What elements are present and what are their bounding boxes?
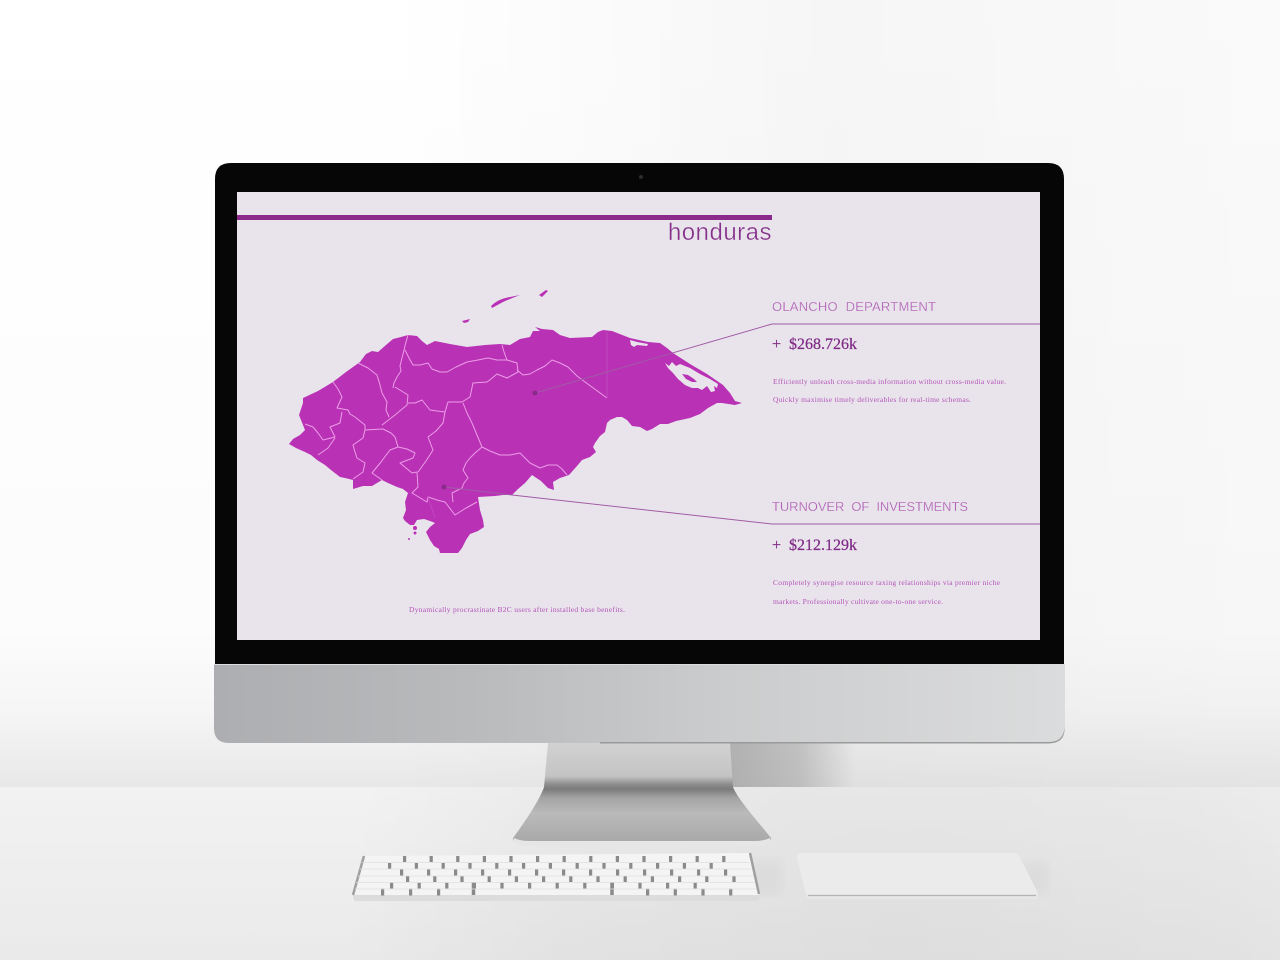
stand shadow on wall	[730, 743, 855, 787]
trackpad edge line	[808, 894, 1036, 896]
panel: Turnover of investments	[772, 499, 1001, 606]
monitor chin	[214, 664, 1065, 743]
key gaps	[381, 859, 740, 895]
desk shading	[0, 787, 1280, 960]
camera	[639, 175, 643, 179]
leader line: Olancho	[532, 324, 1040, 396]
trackpad	[797, 853, 1038, 899]
description line 2: markets. Professionally cultivate one-to-one service.	[773, 597, 943, 606]
islands	[408, 290, 548, 540]
trackpad shadow	[1022, 862, 1048, 894]
title bar	[237, 215, 772, 220]
map landmass	[289, 327, 742, 553]
trackpad front edge	[806, 894, 1038, 899]
chin lower rim	[600, 728, 1065, 744]
trackpad top	[797, 853, 1038, 895]
value: + $212.129k	[772, 537, 857, 554]
faint straight border	[428, 332, 607, 518]
key row lines	[355, 862, 756, 889]
keyboard	[352, 853, 759, 901]
monitor stand	[513, 743, 771, 846]
value: + $268.726k	[772, 336, 857, 353]
panel: Olancho department	[772, 299, 1006, 404]
keyboard side edges	[353, 853, 759, 895]
keyboard body	[352, 853, 759, 901]
heading: TURNOVER OF INVESTMENTS	[772, 499, 968, 514]
desk surface	[0, 787, 1280, 960]
map of Honduras	[289, 290, 742, 553]
keyboard shadow	[752, 860, 782, 894]
monitor body black bezel	[215, 163, 1064, 665]
department borders	[305, 335, 607, 515]
map caption: Dynamically procrastinate B2C users after installed base benefits.	[409, 605, 625, 614]
keyboard front edge	[353, 895, 759, 901]
description line 1: Efficiently unleash cross-media information without cross-media value.	[773, 377, 1006, 386]
monitor	[214, 163, 1065, 744]
title: honduras	[668, 219, 772, 246]
heading: OLANCHO DEPARTMENT	[772, 299, 936, 314]
description line 2: Quickly maximise timely deliverables for real-time schemas.	[773, 395, 971, 404]
chin top highlight	[214, 664, 1065, 665]
description line 1: Completely synergise resource taxing relationships via premier niche	[773, 578, 1001, 587]
screen	[237, 192, 1040, 640]
leader line: Turnover	[442, 484, 1040, 524]
